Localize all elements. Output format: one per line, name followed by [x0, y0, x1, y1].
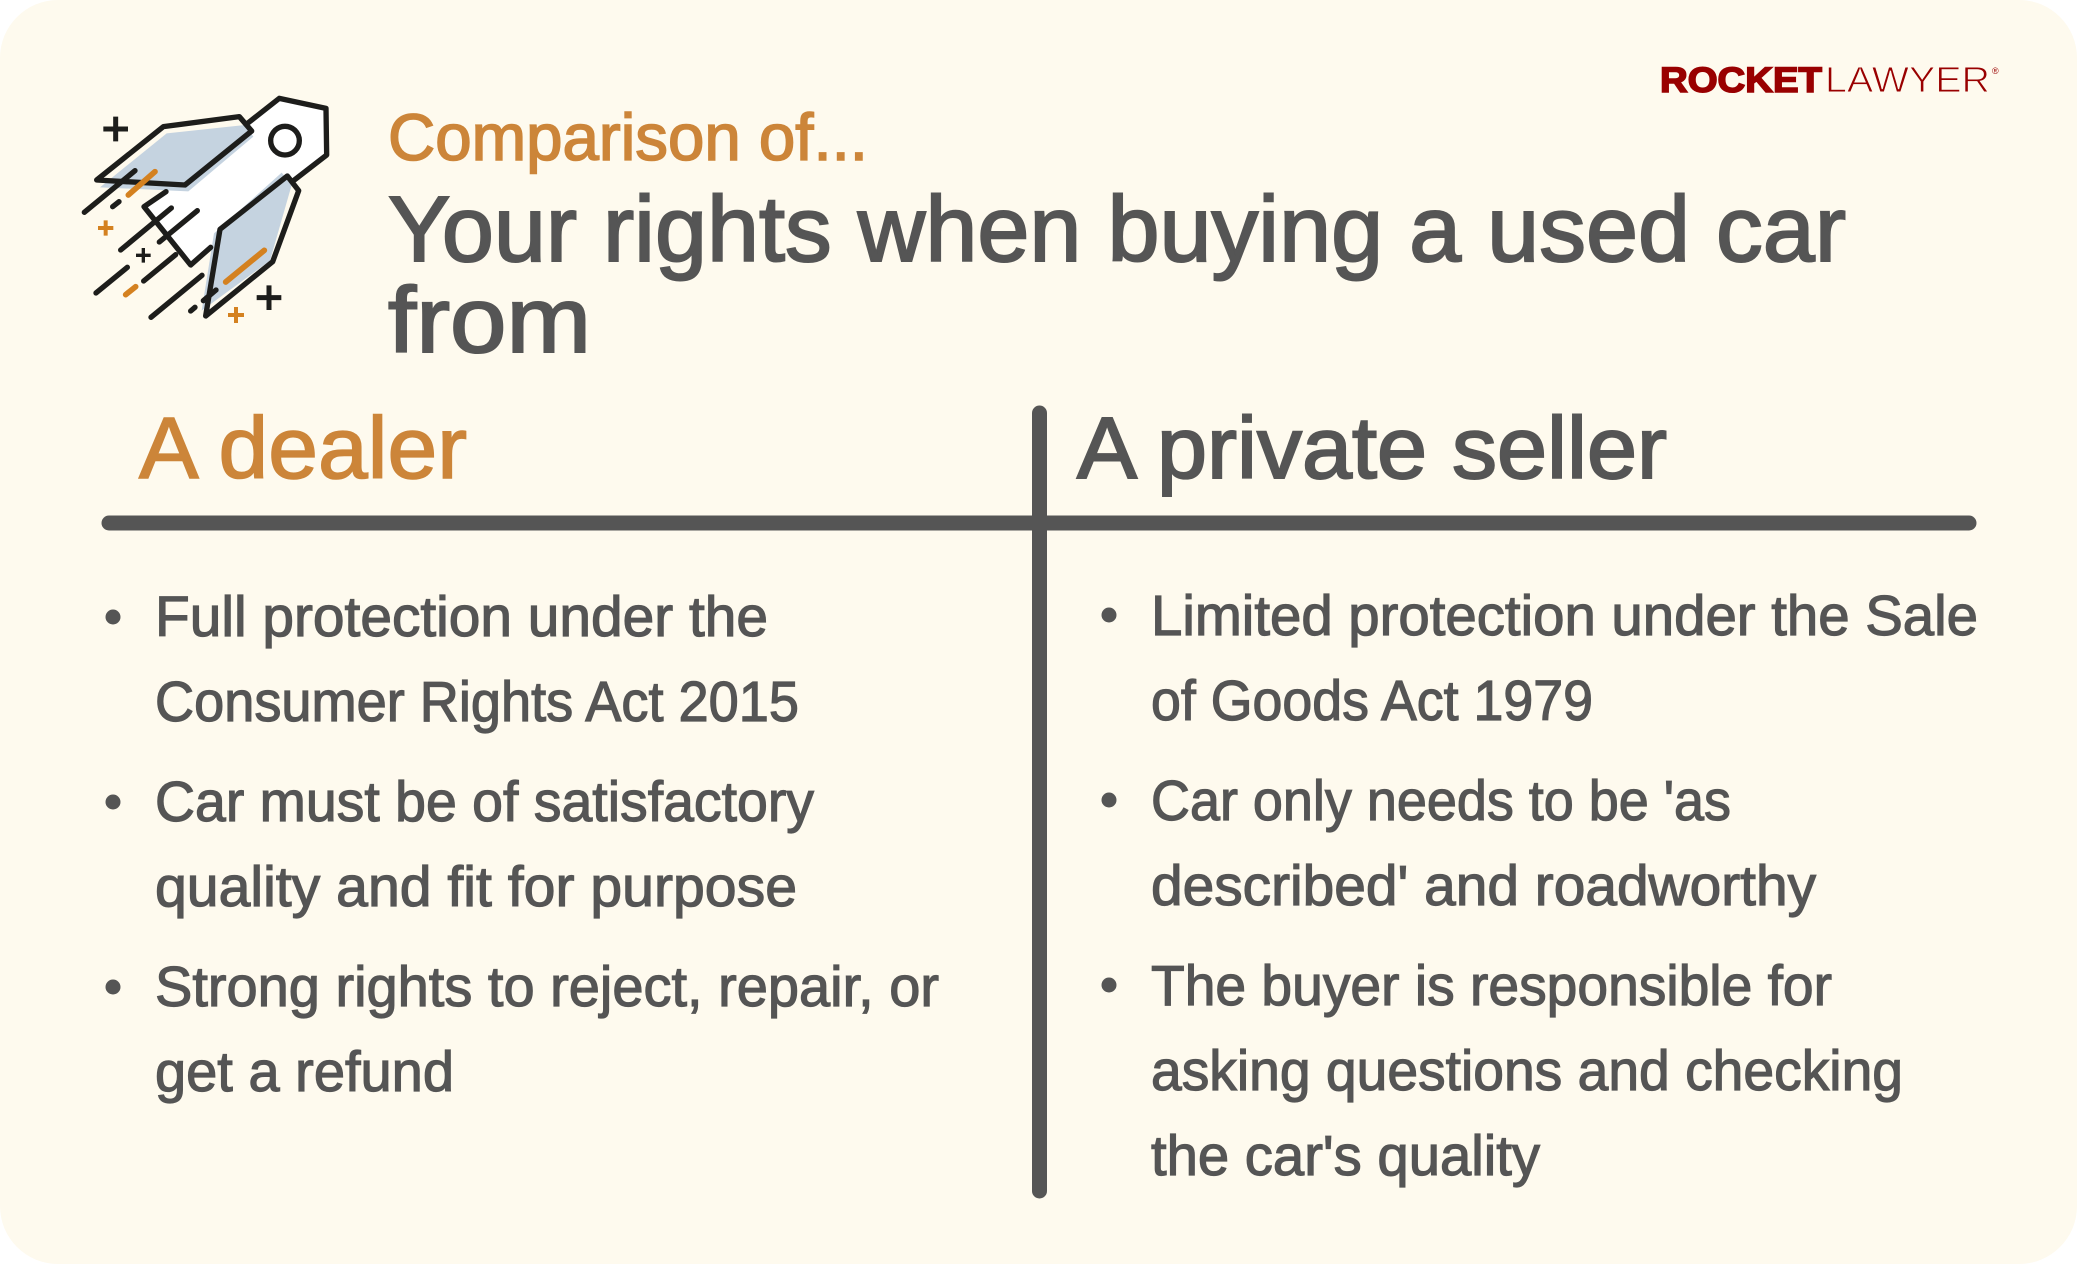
bullet 1: limited protection: of Goods Act 1979: [1151, 669, 1593, 733]
bullet 1: full protection: Consumer Rights Act 2015: [155, 670, 799, 734]
bullet 2: satisfactory quality: quality and fit for purpose: [155, 855, 797, 919]
bullet 1: limited protection: [1102, 584, 1978, 733]
bullet 3: strong rights: get a refund: [155, 1040, 454, 1104]
table divider: vertical rule: [1032, 413, 1047, 1191]
logo: Rocket Lawyer: [1660, 59, 1999, 100]
list: dealer rights: [106, 585, 939, 1104]
logo: Rocket Lawyer: ®: [1992, 66, 1999, 76]
list: private seller rights: [1102, 584, 1978, 1188]
bullet 3: buyer responsible: The buyer is responsible for: [1151, 954, 1832, 1018]
bullet 1: full protection: [106, 585, 799, 734]
bullet 3: buyer responsible: [1102, 954, 1903, 1188]
bullet 1: limited protection: Limited protection under the Sale: [1151, 584, 1978, 648]
icon: rocket: [84, 98, 327, 323]
bullet 2: as described: Car only needs to be 'as: [1151, 769, 1731, 833]
eyebrow heading: Comparison of...: [388, 100, 868, 174]
title: [388, 177, 1846, 372]
logo: Rocket Lawyer: ROCKET: [1660, 61, 1822, 100]
bullet 2: satisfactory quality: Car must be of satisfactory: [155, 770, 814, 834]
bullet 3: buyer responsible: asking questions and checking: [1151, 1039, 1903, 1103]
bullet 1: full protection: Full protection under the: [155, 585, 768, 649]
title: Your rights when buying a used car: [388, 177, 1846, 281]
bullet 2: satisfactory quality: [106, 770, 814, 919]
bullet 3: buyer responsible: the car's quality: [1151, 1124, 1540, 1188]
bullet 3: strong rights: Strong rights to reject, repair, or: [155, 955, 939, 1019]
logo: Rocket Lawyer: LAWYER: [1825, 59, 1990, 100]
bullet 3: strong rights: [106, 955, 939, 1104]
bullet 2: as described: described' and roadworthy: [1151, 854, 1816, 918]
bullet 2: as described: [1102, 769, 1816, 918]
title: from: [388, 268, 591, 372]
column heading: a dealer: A dealer: [139, 400, 467, 497]
column heading: a private seller: A private seller: [1077, 400, 1667, 497]
table divider: horizontal rule: [109, 516, 1969, 530]
